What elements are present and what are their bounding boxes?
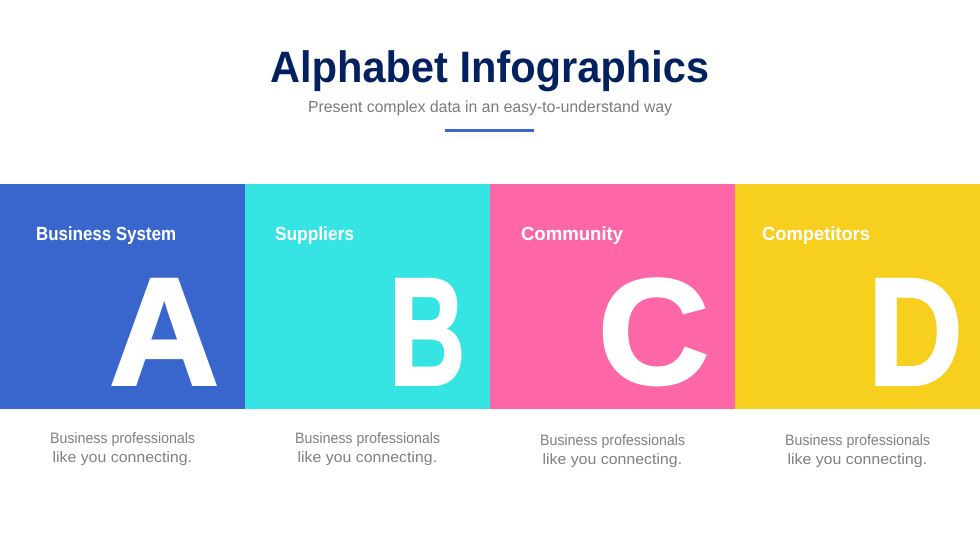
letter B: B (389, 246, 465, 418)
title: Alphabet Infographics (270, 43, 709, 92)
description B: Business professionals (295, 430, 440, 447)
description D: Business professionals (785, 432, 930, 449)
heading: Community: Community (521, 224, 623, 245)
panel: B Suppliers (245, 184, 490, 418)
heading: Business System: Business System (36, 224, 176, 245)
letter C: C (598, 248, 709, 416)
description C: like you connecting. (542, 451, 682, 468)
description D (785, 432, 930, 468)
description B (295, 430, 440, 466)
description A: like you connecting. (52, 449, 192, 466)
description C: Business professionals (540, 432, 685, 449)
letter A: A (110, 246, 219, 418)
heading: Competitors: Competitors (762, 224, 870, 245)
description C (540, 432, 685, 468)
panel: C Community (490, 184, 735, 416)
heading: Suppliers: Suppliers (275, 224, 354, 245)
description B: like you connecting. (298, 449, 437, 466)
panel: D Competitors (735, 184, 980, 418)
subtitle: Present complex data in an easy-to-understand way (308, 99, 672, 116)
description A: Business professionals (50, 430, 195, 447)
title underline (445, 129, 534, 132)
letter D: D (868, 246, 963, 418)
panel: A Business System (0, 184, 245, 418)
description D: like you connecting. (788, 451, 927, 468)
description A (50, 430, 195, 466)
